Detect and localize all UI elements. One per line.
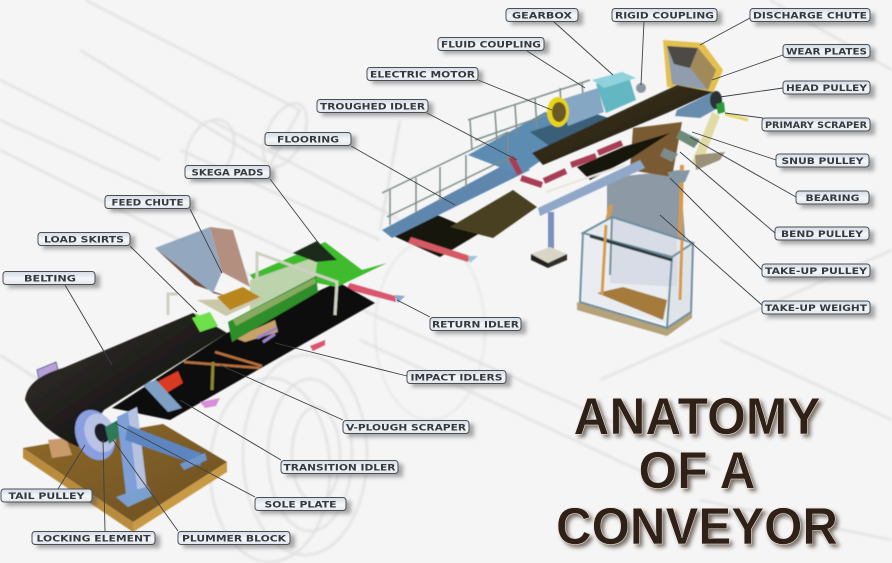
- title: anatomy of a conveyor: CONVEYOR: [559, 501, 841, 559]
- leader: tail pulley: [58, 445, 85, 489]
- walkway platform: [382, 112, 600, 238]
- label: v-plough scraper: V-PLOUGH SCRAPER: [346, 424, 466, 434]
- label: belting: BELTING: [24, 274, 76, 284]
- leader: v-plough scraper: [220, 365, 343, 420]
- label: flooring: FLOORING: [277, 136, 339, 146]
- label: return idler: RETURN IDLER: [432, 320, 519, 330]
- label: feed chute: [105, 196, 190, 208]
- label: discharge chute: [750, 8, 870, 22]
- take-up weight cage: [577, 217, 693, 336]
- label: take-up pulley: [762, 264, 870, 277]
- label: discharge chute: DISCHARGE CHUTE: [753, 12, 867, 22]
- label: impact idlers: IMPACT IDLERS: [410, 374, 502, 384]
- leader: take-up pulley: [670, 178, 762, 270]
- label: tail pulley: [1, 489, 92, 502]
- label: feed chute: FEED CHUTE: [112, 198, 184, 208]
- title: anatomy of a conveyor: OF A: [642, 445, 758, 503]
- label: rigid coupling: [612, 8, 717, 22]
- title: anatomy of a conveyor: OF A: [638, 442, 756, 500]
- label: rigid coupling: RIGID COUPLING: [615, 12, 714, 22]
- leader lines: [58, 18, 796, 531]
- label: return idler: [430, 318, 521, 330]
- skega pads: green rubber skirt: [192, 241, 387, 342]
- feed chute: [155, 227, 265, 316]
- transition idler: [142, 371, 183, 412]
- label: impact idlers: [407, 370, 506, 384]
- label: primary scraper: PRIMARY SCRAPER: [765, 121, 867, 131]
- gearbox: [592, 72, 636, 113]
- label: troughed idler: [317, 100, 428, 112]
- label: skega pads: SKEGA PADS: [192, 168, 264, 178]
- label: snub pulley: [776, 154, 869, 167]
- label: bearing: BEARING: [806, 194, 860, 204]
- tail stand: [116, 407, 207, 507]
- label: plummer block: [178, 532, 290, 544]
- label: bearing: [796, 191, 869, 204]
- leader: sole plate: [115, 423, 255, 497]
- impact idlers and scraper details: [184, 320, 325, 408]
- label: wear plates: WEAR PLATES: [786, 48, 867, 58]
- label: tail pulley: TAIL PULLEY: [8, 492, 85, 502]
- label: v-plough scraper: [343, 420, 469, 434]
- head section: black floor grid: [387, 212, 480, 257]
- leader: impact idlers: [275, 343, 407, 376]
- label: take-up weight: [762, 301, 870, 314]
- leader: flooring: [351, 146, 455, 205]
- title: anatomy of a conveyor: ANATOMY: [574, 388, 820, 446]
- label: troughed idler: TROUGHED IDLER: [320, 102, 425, 112]
- leader: fluid coupling: [527, 51, 585, 88]
- label: bend pulley: BEND PULLEY: [781, 230, 864, 240]
- leader: snub pulley: [692, 132, 776, 160]
- leader: electric motor: [478, 80, 552, 110]
- leader: transition idler: [180, 400, 281, 460]
- label: bend pulley: [775, 227, 869, 240]
- label: fluid coupling: FLUID COUPLING: [441, 40, 541, 50]
- leader: troughed idler: [427, 113, 517, 160]
- title: anatomy of a conveyor: ANATOMY: [576, 391, 824, 449]
- leader: primary scraper: [725, 113, 763, 118]
- label: gearbox: GEARBOX: [512, 12, 572, 22]
- leader: take-up weight: [660, 215, 762, 305]
- handrails: [382, 80, 590, 225]
- primary scraper: [725, 114, 748, 120]
- label: load skirts: LOAD SKIRTS: [44, 236, 124, 246]
- label: snub pulley: SNUB PULLEY: [782, 157, 864, 167]
- label: take-up weight: TAKE-UP WEIGHT: [765, 304, 867, 314]
- return idler: left section far end: [346, 283, 405, 303]
- label: belting: [3, 272, 95, 284]
- label: head pulley: HEAD PULLEY: [786, 84, 868, 94]
- take-up tower: [577, 122, 686, 250]
- lower frame: black deck: [112, 282, 375, 420]
- tail section base: wooden plinth: [23, 424, 227, 532]
- leader: return idler: [397, 300, 430, 317]
- return idler: right section: [408, 237, 478, 263]
- title: anatomy of a conveyor: CONVEYOR: [556, 498, 838, 556]
- label: electric motor: ELECTRIC MOTOR: [370, 70, 475, 80]
- leader: bearing: [690, 137, 796, 197]
- label: locking element: [32, 532, 155, 544]
- support beam and footing: [531, 160, 645, 268]
- label: wear plates: [783, 44, 870, 58]
- label: skega pads: [185, 166, 270, 178]
- head conveyor belt: [532, 85, 713, 165]
- title: anatomy of a conveyor: [556, 388, 841, 559]
- tail pulley: [68, 404, 122, 466]
- label: electric motor: [367, 68, 478, 80]
- discharge chute: [663, 40, 723, 93]
- leader: wear plates: [712, 55, 783, 80]
- bearing plate behind belt: [37, 362, 60, 384]
- leader: belting: [65, 285, 112, 365]
- leader: gearbox: [553, 21, 613, 75]
- rigid coupling: [636, 83, 646, 93]
- head pulley: [675, 91, 725, 118]
- leader: locking element: [103, 440, 105, 531]
- label: flooring: [265, 132, 351, 146]
- leader: discharge chute: [700, 18, 750, 45]
- label: sole plate: [255, 498, 346, 510]
- leader: bend pulley: [680, 152, 775, 233]
- label: fluid coupling: [438, 38, 544, 50]
- belting: [25, 313, 227, 447]
- label: plummer block: PLUMMER BLOCK: [182, 534, 286, 544]
- walkway drive base: [530, 112, 615, 150]
- snub and bend pulleys: [660, 130, 700, 184]
- leader: head pulley: [720, 88, 783, 97]
- label: sole plate: SOLE PLATE: [264, 500, 337, 510]
- label: gearbox: [506, 8, 578, 22]
- label: primary scraper: [762, 118, 870, 131]
- load skirts frame: [168, 253, 337, 315]
- stand behind pulley: [48, 438, 72, 458]
- leader: rigid coupling: [641, 21, 644, 85]
- leader: feed chute: [190, 209, 222, 273]
- label: locking element: LOCKING ELEMENT: [36, 534, 151, 544]
- label: transition idler: TRANSITION IDLER: [284, 464, 396, 474]
- label: transition idler: [281, 460, 398, 474]
- leader: skega pads: [270, 179, 320, 245]
- leader: load skirts: [130, 246, 197, 312]
- label: load skirts: [38, 232, 130, 246]
- head frame: [692, 112, 725, 170]
- electric motor: [547, 88, 604, 127]
- label: head pulley: [783, 81, 870, 94]
- troughed idlers: [511, 143, 625, 192]
- machinery: whole conveyor drawing: [23, 40, 748, 532]
- leader: plummer block: [113, 440, 178, 531]
- label: take-up pulley: TAKE-UP PULLEY: [765, 267, 868, 277]
